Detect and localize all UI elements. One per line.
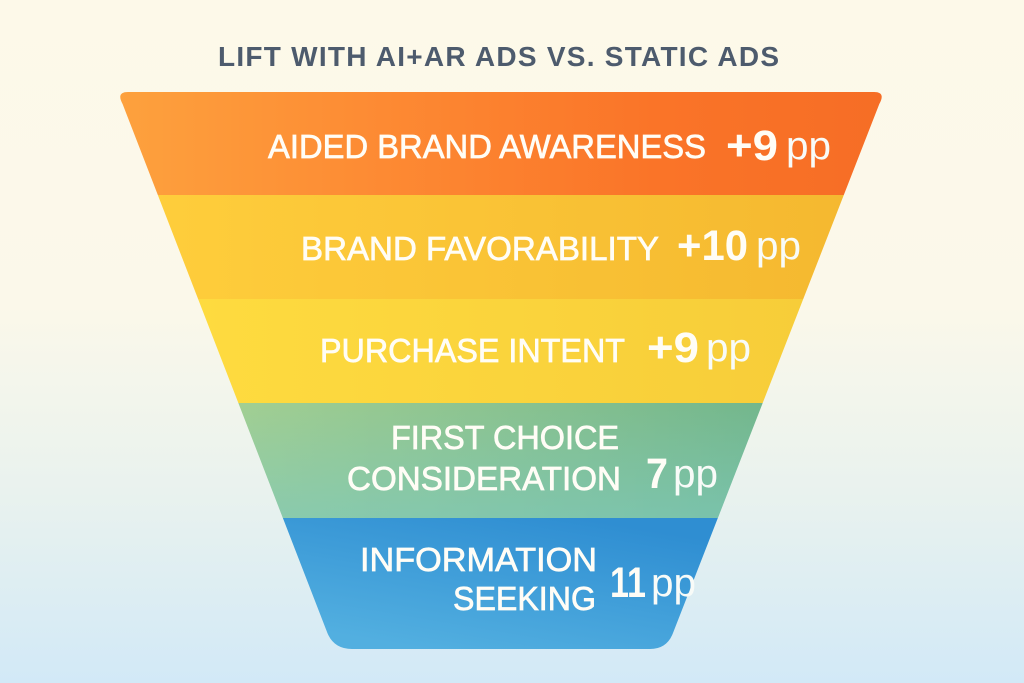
stage: first choice consideration: 7 bbox=[646, 450, 668, 498]
stage: purchase intent: PURCHASE INTENT bbox=[320, 332, 625, 369]
stage: information seeking: SEEKING bbox=[453, 580, 596, 617]
stage: brand favorability: +10 bbox=[677, 222, 748, 270]
title: LIFT WITH AI+AR ADS VS. STATIC ADS bbox=[218, 41, 779, 72]
stage: first choice consideration: FIRST CHOICE bbox=[391, 419, 619, 456]
stage: information seeking: INFORMATION bbox=[360, 541, 597, 578]
stage: information seeking: pp bbox=[651, 561, 696, 605]
stage: first choice consideration: CONSIDERATION bbox=[347, 460, 621, 497]
stage: aided brand awareness: AIDED BRAND AWARENESS bbox=[268, 128, 706, 165]
stage: first choice consideration: pp bbox=[673, 452, 718, 496]
stage: brand favorability: pp bbox=[756, 224, 801, 268]
stage: aided brand awareness: pp bbox=[786, 124, 831, 168]
stage: information seeking: 11 bbox=[610, 559, 646, 607]
funnel chart bbox=[110, 92, 890, 649]
stage: purchase intent: +9 bbox=[647, 324, 699, 372]
funnel bands bbox=[110, 92, 890, 649]
stage: purchase intent bbox=[320, 324, 751, 372]
stage: aided brand awareness: +9 bbox=[726, 122, 778, 170]
stage: purchase intent: pp bbox=[706, 326, 751, 370]
stage: brand favorability: BRAND FAVORABILITY bbox=[301, 230, 659, 267]
stage: first choice consideration bbox=[347, 419, 718, 498]
stage: brand favorability bbox=[301, 222, 801, 270]
stage: information seeking bbox=[360, 541, 696, 617]
stage: aided brand awareness bbox=[268, 122, 831, 170]
